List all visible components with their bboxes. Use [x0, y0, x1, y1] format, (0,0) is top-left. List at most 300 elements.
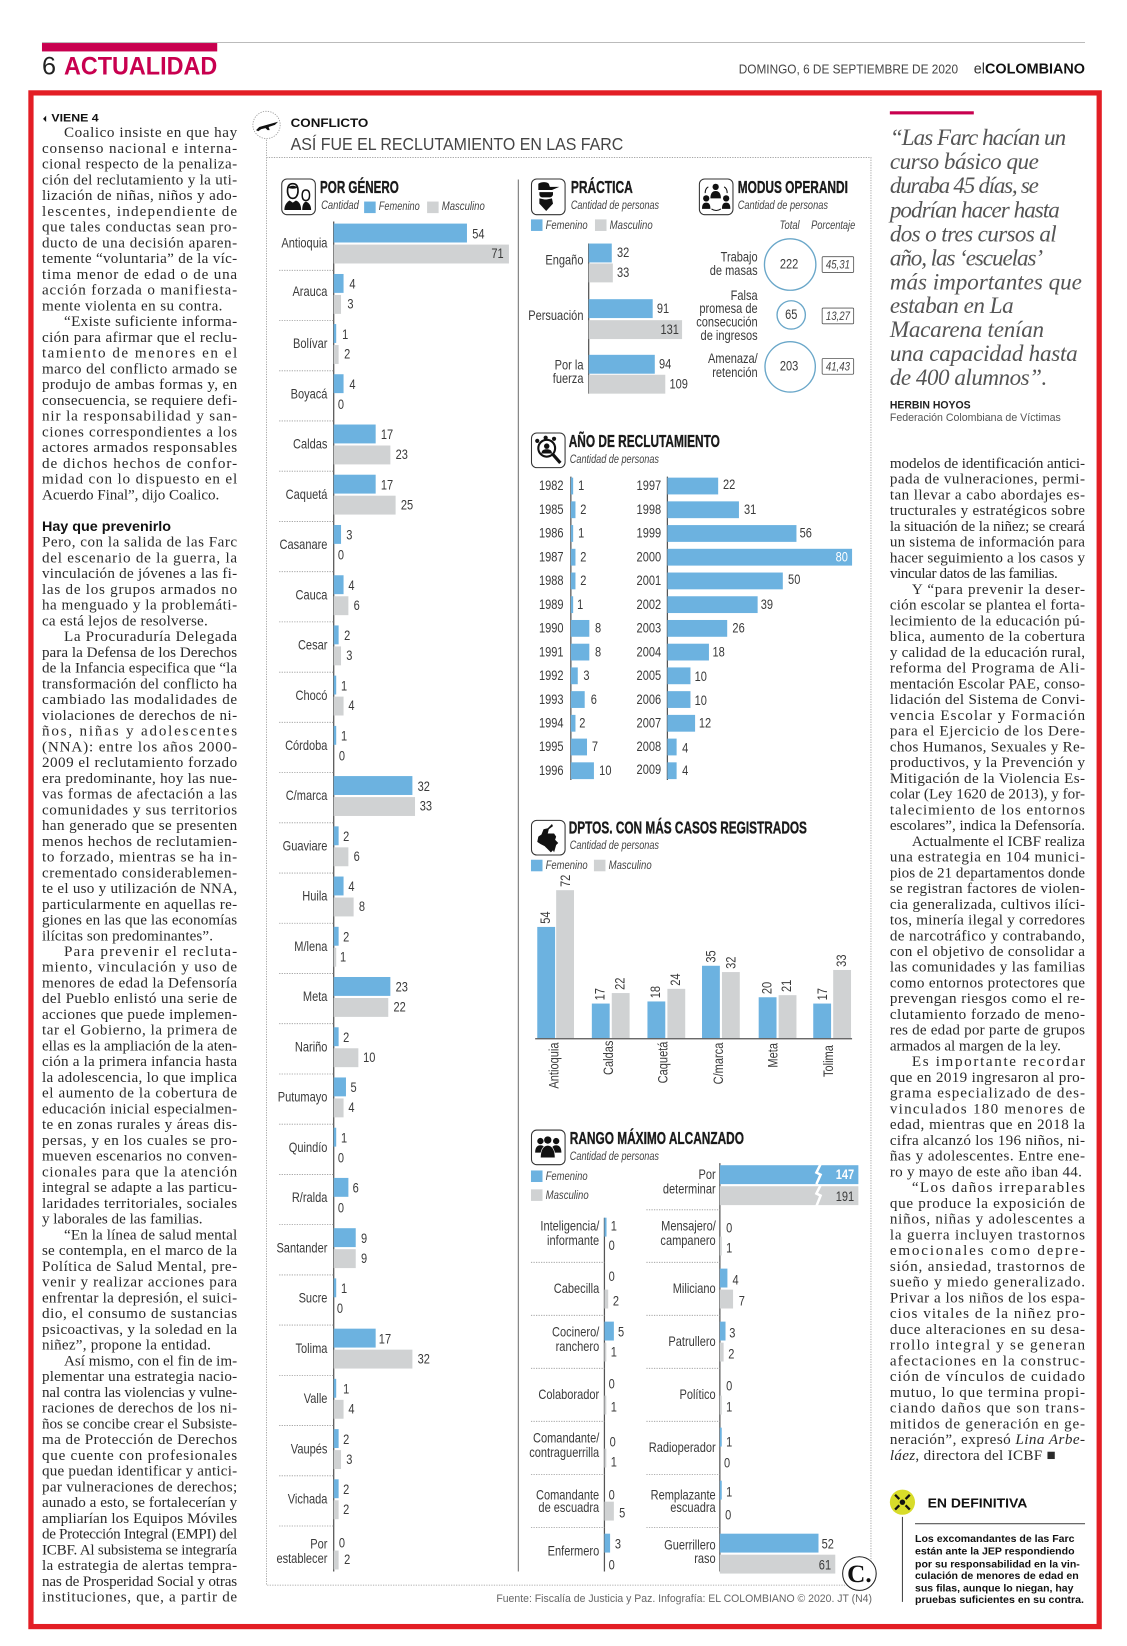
row: Bolívar: 2: [344, 347, 350, 362]
bar chart: 1997-2009: 2007: [637, 715, 661, 731]
paragraph 7: plementar una estrategia nacio-: [42, 1369, 237, 1385]
bar chart: 1982-1996: 2: [580, 549, 587, 565]
paragraph 1: cional respecto de la penaliza-: [42, 157, 237, 173]
row: Quindío: 1: [341, 1130, 347, 1146]
row: Patrullero: [668, 1322, 736, 1362]
row: Por la fuerza: fuerza: [553, 371, 584, 386]
row: Mensajero/campanero: 0: [726, 1220, 732, 1236]
bar chart: 1997-2009: 31: [744, 502, 756, 517]
paragraph 6: psicoactivas, y la soledad en la: [42, 1322, 237, 1338]
legend: Masculino: [546, 1188, 589, 1202]
paragraph 1: que tales conductas sean pro-: [42, 220, 237, 236]
row: Antioquia: [281, 224, 509, 263]
paragraph 7: Así mismo, con el fin de im-: [64, 1353, 237, 1369]
paragraph 5: ellas es la ampliación de la aten-: [42, 1038, 237, 1054]
legend: [531, 858, 652, 872]
pull quote: Macarena tenían: [889, 316, 1044, 342]
row: Vichada: 2: [343, 1482, 349, 1497]
bar chart: 1982-1996: 2: [579, 715, 585, 731]
paragraph 1: temente “voluntaria” de la víc-: [42, 251, 237, 267]
heading: MODUS OPERANDI: [738, 177, 848, 197]
bar chart: práctica: [528, 244, 688, 394]
legend: Cantidad: [321, 198, 360, 212]
row: Cauca: Cauca: [295, 587, 327, 603]
bar chart: 1997-2009: [637, 477, 852, 780]
row: Mensajero/campanero: 1: [726, 1240, 732, 1256]
right text: paragraph 2: Mitigación de la Violencia Es-: [890, 771, 1085, 787]
paragraph 6: venir y realizar acciones para: [42, 1275, 237, 1291]
row: Mensajero/campanero: Mensajero/: [661, 1218, 716, 1234]
row: Tolima: Tolima: [296, 1341, 327, 1356]
row: M/lena: M/lena: [294, 939, 327, 954]
row: Engaño: [545, 244, 629, 282]
paragraph 4: La Procuraduría Delegada: [64, 629, 237, 645]
row: Comandante de escuadra: 5: [619, 1505, 625, 1521]
right text: paragraph 2: Y “para prevenir la deser-: [912, 582, 1085, 598]
paragraph 3: ca está lejos de resolverse.: [42, 613, 208, 629]
paragraph 5: te en zonas rurales y áreas dis-: [42, 1117, 237, 1133]
paragraph 4: particularmente en aquellas re-: [42, 897, 237, 913]
row: Casanare: 0: [338, 548, 344, 563]
legend: Masculino: [610, 218, 653, 232]
bar chart: 1997-2009: 18: [713, 644, 725, 660]
paragraph 4: vas formas de afectación a las: [42, 787, 237, 803]
column labels: Total: [780, 218, 800, 232]
right text: paragraph 3: [890, 834, 1085, 1054]
row: Putumayo: 4: [348, 1100, 355, 1115]
paragraph 3: las de los grupos armados no: [42, 582, 237, 598]
bar chart: rangos, right: [646, 1163, 858, 1574]
row: Persuación: [528, 299, 682, 339]
bar chart: 1982-1996: 6: [591, 692, 597, 707]
paragraph 1: [42, 125, 238, 314]
paragraph 4: violaciones de derechos de ni-: [42, 708, 237, 724]
section: rango máximo alcanzado: [529, 1128, 858, 1574]
paragraph 1: Coalico insiste en que hay: [64, 125, 238, 141]
row: Por establecer: Por: [310, 1536, 327, 1552]
right text: paragraph 5: ciando daños que son trans-: [890, 1401, 1085, 1417]
paragraph 7: [42, 1353, 238, 1606]
row: Comandante/contraguerrilla: contraguerrilla: [529, 1445, 599, 1460]
row: Caquetá: 17: [381, 477, 393, 493]
right text: paragraph 3: como entornos protectores que: [890, 975, 1085, 991]
row: Valle: 1: [343, 1381, 349, 1397]
right text: paragraph 5: “Los daños irreparables: [912, 1180, 1085, 1196]
bar chart: 1997-2009: 10: [695, 693, 707, 708]
subheading: Cantidad de personas: [570, 838, 659, 852]
date: DOMINGO, 6 DE SEPTIEMBRE DE 2020: [739, 61, 958, 76]
row: Por establecer: establecer: [276, 1551, 327, 1566]
right text: paragraph 3: tos, minería ilegal y corredores: [890, 913, 1085, 929]
right text: paragraph 5: cios vitales de la niñez pro-: [890, 1306, 1085, 1322]
row: Enfermero: [548, 1534, 621, 1573]
column labels: [780, 218, 855, 232]
row: Inteligencia/informante: 0: [609, 1238, 615, 1254]
right text: paragraph 2: lidación del Sistema de Convi-: [890, 692, 1085, 708]
row: Chocó: [295, 676, 355, 716]
group: C/marca: [702, 950, 740, 1084]
source note: Fuente: Fiscalía de Justicia y Paz. Infografía: EL COLOMBIANO © 2020. JT (N4): [496, 1593, 872, 1605]
row: Huila: [302, 877, 365, 916]
bar chart: 1982-1996: [539, 477, 612, 780]
group: Caquetá: [647, 973, 685, 1083]
row: Comandante de escuadra: 0: [609, 1487, 615, 1503]
bar chart: 1982-1996: 1985: [539, 502, 564, 517]
row: Caquetá: 25: [401, 497, 413, 513]
pull quote: [888, 124, 1082, 390]
row: Caquetá: [286, 475, 413, 515]
paragraph 5: menores de edad la Defensoría: [42, 975, 237, 991]
paragraph 1: tima menor de edad o de una: [42, 267, 237, 283]
paragraph 3: vinculación de jóvenes a las fi-: [42, 566, 237, 582]
paragraph 5: laridades territoriales, sociales: [42, 1196, 237, 1212]
legend: Femenino: [546, 1169, 588, 1183]
row: amenaza / retención: [708, 342, 854, 392]
paragraph 3: del escenario de la guerra, la: [42, 550, 237, 566]
summary text: Los excomandantes de las Farc: [915, 1534, 1075, 1545]
right text: paragraph 1: tructurales y estratégicos sobre: [890, 503, 1085, 519]
row: Vaupés: 2: [343, 1432, 349, 1447]
bar chart: rangos, left: [529, 1218, 625, 1573]
paragraph 6: se contempla, en el marco de la: [42, 1243, 237, 1259]
right text: paragraph 2: talecimiento de los entornos: [890, 802, 1085, 818]
right text: paragraph 2: mentación Escolar PAE, conso-: [890, 676, 1085, 692]
bar chart: 1997-2009: 39: [761, 597, 773, 612]
icon: group with arrows: [699, 179, 733, 215]
right text: paragraph 3: cia generalizada, cultivos ilíci-: [890, 897, 1085, 913]
bar chart: 1982-1996: 1: [578, 526, 584, 541]
row: falsa promesa: consecución: [696, 314, 758, 330]
bar chart: 1982-1996: 1993: [539, 692, 564, 707]
row: Meta: Meta: [303, 989, 327, 1004]
column separator: [517, 180, 519, 1571]
paragraph 1: consenso nacional e interna-: [42, 141, 237, 157]
row: Cesar: 3: [346, 648, 353, 663]
row: C/marca: 32: [418, 779, 430, 794]
row: Chocó: 1: [341, 678, 347, 694]
row: Político: [679, 1378, 732, 1415]
row: Cocinero/ranchero: 1: [611, 1344, 617, 1360]
right text: paragraph 3: con el objetivo de consolidar a: [890, 944, 1085, 960]
paragraph 6: Política de Salud Mental, pre-: [42, 1259, 237, 1275]
summary text: pruebas suficientes en su contra.: [915, 1595, 1084, 1606]
right text: paragraph 5: neración”, expresó Lina Arbe-: [890, 1432, 1085, 1448]
right text: paragraph 3: se registran factores de violen-: [890, 881, 1085, 897]
row: Sucre: [299, 1278, 347, 1316]
row: M/lena: 1: [340, 949, 346, 965]
row: Cesar: 2: [344, 628, 350, 643]
row: Guaviare: [283, 826, 360, 866]
row: Córdoba: Córdoba: [285, 738, 328, 753]
row: Chocó: 4: [348, 698, 355, 714]
bar chart: por género: [276, 221, 509, 1571]
paragraph 4: giones en las que las economías: [42, 913, 237, 929]
right text: paragraph 2: blica, aumento de la cobertura: [890, 629, 1085, 645]
bar chart: 1997-2009: 2002: [637, 597, 661, 612]
row: Enfermero: Enfermero: [548, 1544, 599, 1559]
continuation tag: VIENE 4: [51, 112, 100, 124]
pull quote: estaban en La: [890, 292, 1014, 318]
infographic kicker: CONFLICTO: [291, 116, 368, 130]
group: Caldas: 17: [592, 988, 608, 1000]
row: Caquetá: Caquetá: [286, 487, 328, 502]
right column: [888, 111, 1085, 1606]
row: Arauca: Arauca: [292, 284, 328, 299]
bar chart: 1982-1996: 1996: [539, 763, 564, 778]
row: R/ralda: 0: [338, 1200, 344, 1216]
group: Tolima: 17: [815, 988, 830, 1000]
row: Comandante de escuadra: [536, 1487, 625, 1521]
row: C/marca: C/marca: [286, 788, 328, 804]
paragraph 7: la estrategia de alertas tempra-: [42, 1558, 237, 1574]
row: Cabecilla: Cabecilla: [554, 1281, 599, 1296]
row: Valle: Valle: [304, 1391, 328, 1406]
group: C/marca: 35: [704, 950, 719, 963]
row: falsa promesa: 13,27: [826, 309, 851, 323]
icon: masked man: [531, 179, 565, 215]
row: Tolima: 17: [379, 1331, 391, 1347]
row: Engaño: 33: [617, 265, 629, 280]
right text: paragraph 1: [890, 456, 1085, 582]
row: Inteligencia/informante: informante: [547, 1233, 599, 1248]
paragraph 4: ños, niñas y adolescentes: [42, 724, 237, 740]
right text: paragraph 5: la guerra incluyen trastornos: [890, 1227, 1085, 1243]
right text: paragraph 5: láez, directora del ICBF ■: [890, 1448, 1056, 1464]
page number: 6: [42, 53, 56, 81]
page header: [42, 43, 1085, 81]
right text: paragraph 5: sión, ansiedad, trastornos de: [890, 1259, 1085, 1275]
right text: paragraph 1: modelos de identificación antici-: [890, 456, 1085, 472]
bar chart: 1982-1996: 1986: [539, 526, 564, 541]
legend: Femenino: [379, 199, 420, 213]
row: Quindío: Quindío: [289, 1140, 328, 1155]
row: Bolívar: 1: [342, 327, 348, 342]
row: Mensajero/campanero: [660, 1218, 732, 1256]
row: Radioperador: Radioperador: [649, 1440, 716, 1455]
legend: [531, 1169, 589, 1202]
paragraph 5: el aumento de la cobertura de: [42, 1086, 237, 1102]
row: Por determinar, broken bars: [663, 1164, 858, 1206]
paragraph 5: persas, y en los cuales se pro-: [42, 1133, 237, 1149]
paragraph 4: para la Defensa de los Derechos: [42, 645, 237, 661]
right text: paragraph 3: armados al margen de la ley.: [890, 1038, 1061, 1054]
paragraph 4: crementado considerablemen-: [42, 865, 237, 881]
row: Quindío: 0: [338, 1150, 344, 1166]
heading: POR GÉNERO: [320, 177, 399, 197]
icon: yellow circle with arrows: [890, 1490, 915, 1515]
bar chart: 1982-1996: 3: [583, 668, 590, 683]
group: Caquetá: 24: [668, 973, 683, 986]
row: Comandante/contraguerrilla: Comandante/: [533, 1430, 600, 1446]
subheading: Cantidad de personas: [571, 198, 659, 212]
bar chart: 1982-1996: 1990: [539, 620, 564, 636]
row: Miliciano: 4: [732, 1272, 739, 1288]
section: año de reclutamiento: [531, 431, 852, 780]
row: Santander: 9: [361, 1251, 367, 1266]
subheading: Cantidad de personas: [570, 452, 659, 466]
group: Tolima: Tolima: [821, 1045, 836, 1077]
bar chart: 1982-1996: 1991: [539, 644, 564, 660]
right text: paragraph 3: de narcotráfico y contrabando,: [890, 928, 1085, 944]
bar chart: 1982-1996: 10: [599, 763, 612, 778]
right text: paragraph 5: rrollo integral y se generan: [890, 1338, 1085, 1354]
row: Inteligencia/informante: 1: [611, 1218, 617, 1234]
row: Santander: [276, 1228, 367, 1268]
bar chart: 1997-2009: 2005: [637, 668, 661, 683]
row: C/marca: [286, 776, 432, 816]
paragraph 4: era predominante, hoy las nue-: [42, 771, 237, 787]
row: falsa promesa: de ingresos: [701, 328, 758, 343]
summary text: sus filas, aunque lo niegan, hay: [915, 1583, 1074, 1594]
right text: paragraph 3: una estrategia en 104 munici-: [890, 850, 1085, 866]
row: falsa promesa: [696, 288, 854, 343]
group: Antioquia: 72: [558, 875, 573, 887]
paragraph 2: marco del conflicto armado se: [42, 361, 237, 377]
row: Guerrillero raso: 61: [819, 1557, 831, 1573]
row: Bolívar: [293, 324, 350, 364]
row: Persuación: Persuación: [528, 308, 584, 323]
row: R/ralda: [292, 1178, 359, 1216]
quote attribution: HERBIN HOYOS: [890, 399, 971, 411]
infographic panel: [253, 111, 876, 1605]
right text: paragraph 4: ñas y adolescentes. Entre ene-: [890, 1149, 1085, 1165]
row: Por determinar, broken bars: 191: [836, 1189, 854, 1204]
row: Cabecilla: 2: [613, 1293, 619, 1309]
row: Por determinar, broken bars: determinar: [663, 1181, 716, 1197]
row: Boyacá: Boyacá: [291, 386, 327, 402]
paragraph 6: “En la línea de salud mental: [64, 1227, 237, 1243]
row: Patrullero: Patrullero: [668, 1334, 716, 1349]
pull quote: podrían hacer hasta: [888, 196, 1060, 222]
row: Santander: 9: [361, 1231, 367, 1246]
right text: paragraph 5: duce alteraciones en su desa-: [890, 1322, 1085, 1338]
summary text: por su responsabilidad en la vin-: [915, 1559, 1080, 1570]
right text: paragraph 2: reforma del Programa de Ali-: [890, 661, 1085, 677]
paragraph 5: mueven escenarios no conven-: [42, 1149, 237, 1165]
row: Por la fuerza: 94: [659, 356, 671, 372]
paragraph 2: [42, 314, 238, 503]
row: amenaza / retención: Amenaza/: [708, 351, 758, 367]
row: Patrullero: 3: [729, 1325, 736, 1341]
row: Colaborador: 1: [611, 1399, 617, 1415]
bar chart: 1982-1996: 1: [577, 597, 583, 612]
right text: paragraph 1: vincular datos de las familias.: [890, 566, 1058, 582]
icon: three people: [531, 1130, 565, 1165]
pull quote: curso básico que: [890, 148, 1039, 174]
bar chart: 1997-2009: 56: [800, 526, 812, 541]
pull quote: más importantes que: [890, 269, 1082, 295]
row: Putumayo: Putumayo: [278, 1090, 328, 1105]
right text: paragraph 5: que produce la exposición de: [890, 1196, 1085, 1212]
summary text: están ante la JEP respondiendo: [915, 1547, 1075, 1558]
row: Sucre: 0: [337, 1301, 343, 1316]
paragraph 3: Pero, con la salida de las Farc: [42, 535, 237, 551]
row: C/marca: 33: [420, 799, 432, 814]
paragraph 3: [42, 535, 237, 629]
row: Colaborador: [538, 1376, 617, 1415]
row: Inteligencia/informante: [540, 1218, 617, 1254]
group: Meta: Meta: [765, 1043, 781, 1068]
row: Vichada: 2: [343, 1502, 349, 1517]
legend: Femenino: [546, 858, 588, 872]
paragraph 2: consecuencia, se requiere defi-: [42, 393, 237, 409]
row: Colaborador: 0: [609, 1376, 615, 1392]
row: R/ralda: R/ralda: [292, 1190, 327, 1205]
paragraph 5: integral se adapte a las particu-: [42, 1180, 237, 1196]
row: Guerrillero raso: Guerrillero: [664, 1537, 716, 1553]
row: Nariño: Nariño: [295, 1039, 328, 1055]
row: Remplazante escuadra: escuadra: [670, 1500, 716, 1515]
logo: C.: C.: [847, 1561, 872, 1588]
row: Córdoba: 1: [341, 729, 347, 744]
group: Tolima: [813, 954, 851, 1077]
row: Chocó: Chocó: [295, 688, 327, 703]
row: Remplazante escuadra: Remplazante: [651, 1487, 716, 1503]
right text: paragraph 2: y calidad de la educación rural,: [890, 645, 1085, 661]
right text: paragraph 4: que en 2019 ingresaron al pro-: [890, 1070, 1085, 1086]
bar chart: 1982-1996: 8: [595, 644, 601, 660]
paragraph 5: Para prevenir el recluta-: [64, 944, 237, 960]
logo: C.: [843, 1557, 876, 1590]
paragraph 6: [42, 1227, 237, 1354]
bar chart: 1982-1996: 1995: [539, 739, 564, 754]
row: Cauca: 4: [348, 578, 355, 593]
row: Sucre: Sucre: [299, 1290, 327, 1306]
column labels: Porcentaje: [811, 218, 855, 232]
row: Huila: Huila: [302, 889, 327, 904]
row: Inteligencia/informante: Inteligencia/: [540, 1218, 600, 1234]
paragraph 6: dio, el consumo de sustancias: [42, 1306, 237, 1322]
row: Cocinero/ranchero: ranchero: [556, 1339, 599, 1354]
row: Por determinar, broken bars: 147: [836, 1167, 854, 1182]
group: Caquetá: Caquetá: [655, 1041, 671, 1083]
row: Antioquia: Antioquia: [281, 236, 328, 251]
row: Miliciano: [673, 1269, 745, 1309]
group: Caldas: Caldas: [601, 1041, 616, 1075]
row: Meta: [303, 977, 408, 1017]
paragraph 7: aunado a esto, se fortalecerían y: [42, 1495, 238, 1511]
row: Sucre: 1: [341, 1281, 347, 1296]
row: trabajo de masas: de masas: [710, 263, 758, 278]
right text: paragraph 3: prevengan riesgos como el re-: [890, 991, 1085, 1007]
bar chart: 1997-2009: 4: [682, 740, 688, 756]
row: Radioperador: [649, 1428, 732, 1471]
bar chart: 1997-2009: 2006: [637, 692, 661, 707]
pull quote: duraba 45 días, se: [890, 172, 1039, 198]
row: Caldas: [293, 425, 408, 464]
row: Por la fuerza: 109: [669, 376, 688, 392]
row: Remplazante escuadra: [651, 1481, 732, 1523]
paragraph 7: par vulneraciones de derechos;: [42, 1479, 237, 1495]
right text: paragraph 5: mitidos de generación en ge-: [890, 1416, 1085, 1432]
paragraph 4: menos hechos de reclutamien-: [42, 834, 237, 850]
right text: paragraph 5: ción de vínculos de cuidado: [890, 1369, 1085, 1385]
row: Guerrillero raso: 52: [822, 1536, 834, 1552]
paragraph 4: [42, 629, 238, 944]
icon: two people: [282, 179, 315, 215]
section: práctica: [528, 177, 688, 394]
row: amenaza / retención: retención: [712, 365, 758, 380]
row: Tolima: [296, 1329, 430, 1369]
row: Radioperador: 1: [726, 1434, 732, 1450]
bar chart: 1997-2009: 2001: [637, 573, 661, 588]
right text: paragraph 2: ción escolar se plantea el forta-: [890, 598, 1085, 614]
row: Meta: 23: [396, 980, 408, 995]
row: falsa promesa: 65: [785, 307, 797, 322]
bar chart: 1997-2009: 2000: [637, 549, 661, 565]
paragraph 7: ños se concibe crear el Subsiste-: [42, 1416, 237, 1432]
paragraph 7: que cuente con profesionales: [42, 1448, 237, 1464]
